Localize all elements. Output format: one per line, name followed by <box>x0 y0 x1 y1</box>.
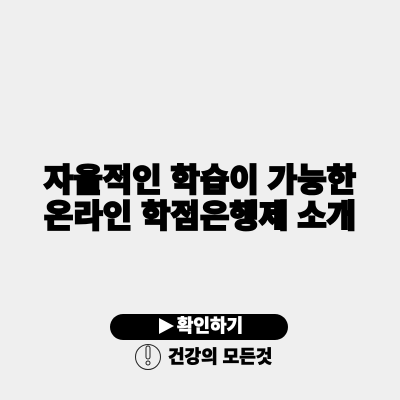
button label: 확인하기 <box>177 316 243 336</box>
brand name: 건강의 모든것 <box>168 347 272 367</box>
icon: exclamation circle <box>135 344 161 370</box>
title <box>43 162 356 234</box>
play triangle <box>159 318 174 334</box>
button: confirm <box>110 314 288 340</box>
title: 온라인 학점은행제 소개 <box>44 198 356 234</box>
title: 자율적인 학습이 가능한 <box>44 162 356 198</box>
